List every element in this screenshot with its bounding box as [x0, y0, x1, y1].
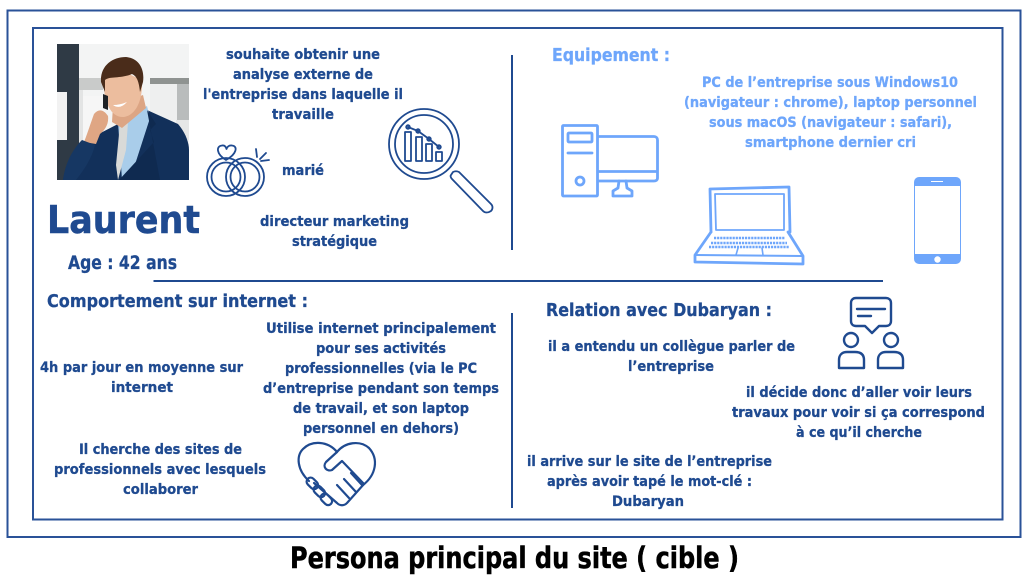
heading: relationship with Dubaryan: Relation avec Dubaryan :	[546, 300, 772, 321]
text: job: stratégique	[292, 233, 377, 250]
icon: heart handshake	[299, 443, 375, 507]
text: equipment: (navigateur : chrome), laptop personnel	[684, 94, 977, 111]
text: equipment: smartphone dernier cri	[745, 134, 916, 151]
age: Age : 42 ans	[68, 252, 177, 274]
text: professional use: d’entreprise pendant son temps	[263, 380, 499, 397]
text: professional use: de travail, et son laptop	[293, 400, 469, 417]
text: goal	[203, 46, 403, 123]
text: equipment: PC de l’entreprise sous Windows10	[702, 74, 958, 91]
text: daily time: internet	[111, 379, 173, 396]
heading: equipment: Equipement :	[552, 45, 670, 66]
icon: magnifier with chart	[389, 109, 492, 212]
text: equipment	[684, 74, 977, 151]
text: decision	[732, 384, 985, 441]
text: decision: à ce qu’il cherche	[796, 424, 922, 441]
text: professional use: professionnelles (via le PC	[285, 360, 477, 377]
text: arrival: Dubaryan	[612, 493, 684, 510]
icon: smartphone	[914, 177, 961, 264]
text: searches	[54, 441, 266, 498]
icon: desktop computer	[562, 126, 658, 196]
text: goal: analyse externe de	[233, 66, 373, 83]
text: professional use: pour ses activités	[316, 340, 446, 357]
text: goal: l'entreprise dans laquelle il	[203, 86, 403, 103]
text: searches: Il cherche des sites de	[79, 441, 242, 458]
text: arrival: après avoir tapé le mot-clé :	[547, 473, 752, 490]
name: Laurent	[47, 198, 200, 242]
text: marital status: marié	[282, 162, 324, 179]
text: searches: professionnels avec lesquels	[54, 461, 266, 478]
text: colleague: l’entreprise	[628, 358, 714, 375]
text: colleague: il a entendu un collègue parler de	[548, 338, 795, 355]
text: professional use: personnel en dehors)	[303, 420, 459, 437]
icon: laptop	[695, 187, 803, 264]
text: decision: il décide donc d’aller voir leurs	[746, 384, 972, 401]
title: Persona principal du site ( cible )	[290, 541, 739, 575]
icon: two people talking	[839, 298, 903, 368]
text: searches: collaborer	[123, 481, 199, 498]
text: daily time: 4h par jour en moyenne sur	[40, 359, 244, 376]
text: colleague	[548, 338, 795, 375]
heading: internet behaviour: Comportement sur internet :	[47, 291, 308, 312]
text: equipment: sous macOS (navigateur : safari),	[709, 114, 952, 131]
text: daily time	[40, 359, 244, 396]
text: job	[260, 213, 409, 250]
photo of Laurent	[57, 44, 189, 180]
text: goal: souhaite obtenir une	[226, 46, 380, 63]
text: professional use	[263, 320, 499, 437]
icon: wedding rings	[207, 145, 269, 196]
text: professional use: Utilise internet principalement	[266, 320, 496, 337]
text: goal: travaille	[272, 106, 334, 123]
text: decision: travaux pour voir si ça correspond	[732, 404, 985, 421]
text: job: directeur marketing	[260, 213, 409, 230]
text: arrival: il arrive sur le site de l’entreprise	[527, 453, 772, 470]
text: arrival	[527, 453, 772, 510]
